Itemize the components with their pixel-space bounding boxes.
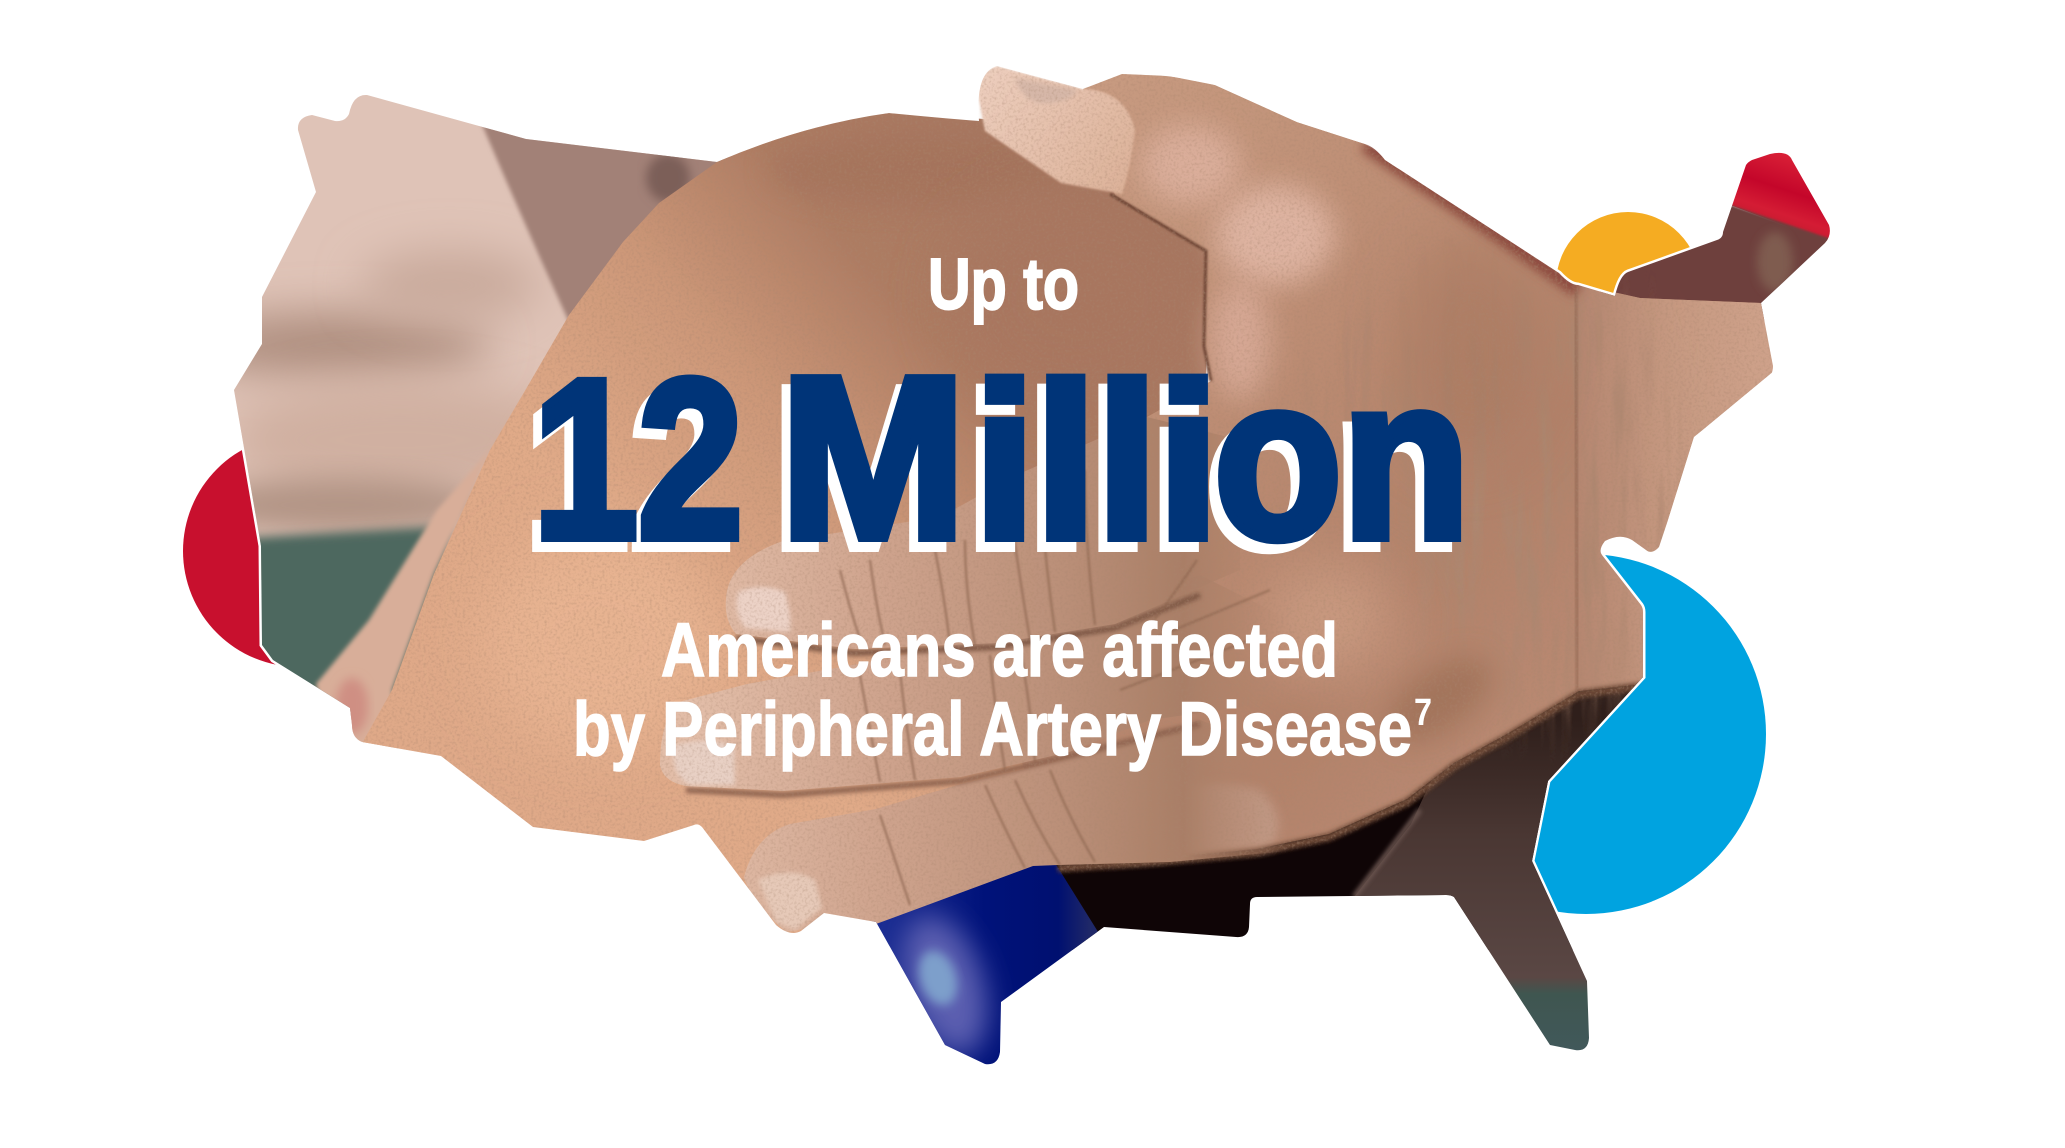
photo background: dark blurred band [190,313,490,377]
white outline of map [234,66,1830,1064]
photo: red item top right [1732,152,1830,242]
hand upper highlight [1140,125,1240,205]
photo: pink fingertip [336,678,368,734]
thumb [978,66,1135,194]
finger creases [840,470,1270,905]
headline number: 12 Million: on [1214,330,1470,586]
photo background: faint band [360,250,540,320]
footnote reference 7: 7 [1414,692,1432,734]
blue garment halo [887,905,1003,1065]
photo background: pale base [220,80,820,580]
hand streaks centre [1300,300,1500,540]
skin group with texture [350,66,1775,950]
photo background: lower shade [200,477,480,533]
hand heel highlight [1210,280,1270,400]
finger 2 nail [673,741,735,785]
photo: dark area under hand [1056,677,1643,950]
photo: grey-brown area lower right [1355,677,1643,1050]
headline number shadow: on [1205,340,1461,596]
text: by Peripheral Artery Disease: by Peripheral Artery Disease [573,687,1412,772]
hand-knee crease [1110,194,1211,381]
finger 1 nail [737,587,790,632]
hand lower highlight [1260,560,1400,680]
hand streaks right [1502,378,1664,748]
knee mid tone [1206,365,1210,382]
photo background: mid tone [238,386,524,487]
hand maroon edge [1365,144,1578,290]
lower hand pad [1110,783,1278,862]
headline number: 12 Million: 12 [533,334,743,586]
text: Americans are affected: Americans are affected [661,608,1338,693]
finger 3 [744,720,1310,932]
headline number shadow: 12 [524,344,734,596]
knee bright patch [502,556,698,730]
headline number: 12 Million: M [780,328,966,586]
hand shaded mid [1400,240,1540,460]
photo background: dark mauve patch [646,154,690,202]
circle: blue accent [1406,554,1766,914]
hand dark low band [1374,641,1506,759]
headline number: 12 Million: illi [974,338,1219,584]
finger 1 [726,417,1240,649]
finger 2 [660,575,1290,791]
headline number shadow: M [771,338,957,596]
headline number shadow: illi [965,348,1210,594]
photo background: mauve panel [480,120,730,322]
back of hand [1000,74,1775,865]
photo: blue garment [870,858,1100,1075]
circle: yellow accent [1556,212,1700,356]
finger 3 nail [758,872,822,930]
photo: hands holding a knee, clipped to US map [190,66,1850,1075]
circle: red accent [183,435,415,667]
photo: dark diagonal highlight [1354,810,1420,897]
photo: maroon area top right [1600,203,1840,320]
finger 1 shadow [736,595,1200,653]
photo: lighter maroon patch [1757,232,1793,292]
wrist [1576,284,1775,691]
knee [350,113,1210,950]
photo background: green floor left [240,526,450,720]
photo: pale finger behind knee [314,464,481,748]
knee dark top [979,116,980,118]
hand bottom shadow [1058,686,1643,868]
wrist crease [1575,290,1578,690]
blue garment highlight [912,946,964,1010]
thumb nail [1015,78,1077,103]
finger 2 shadow [686,724,1200,795]
hand palm highlight [1215,185,1335,285]
text: Up to: Up to [928,245,1079,325]
